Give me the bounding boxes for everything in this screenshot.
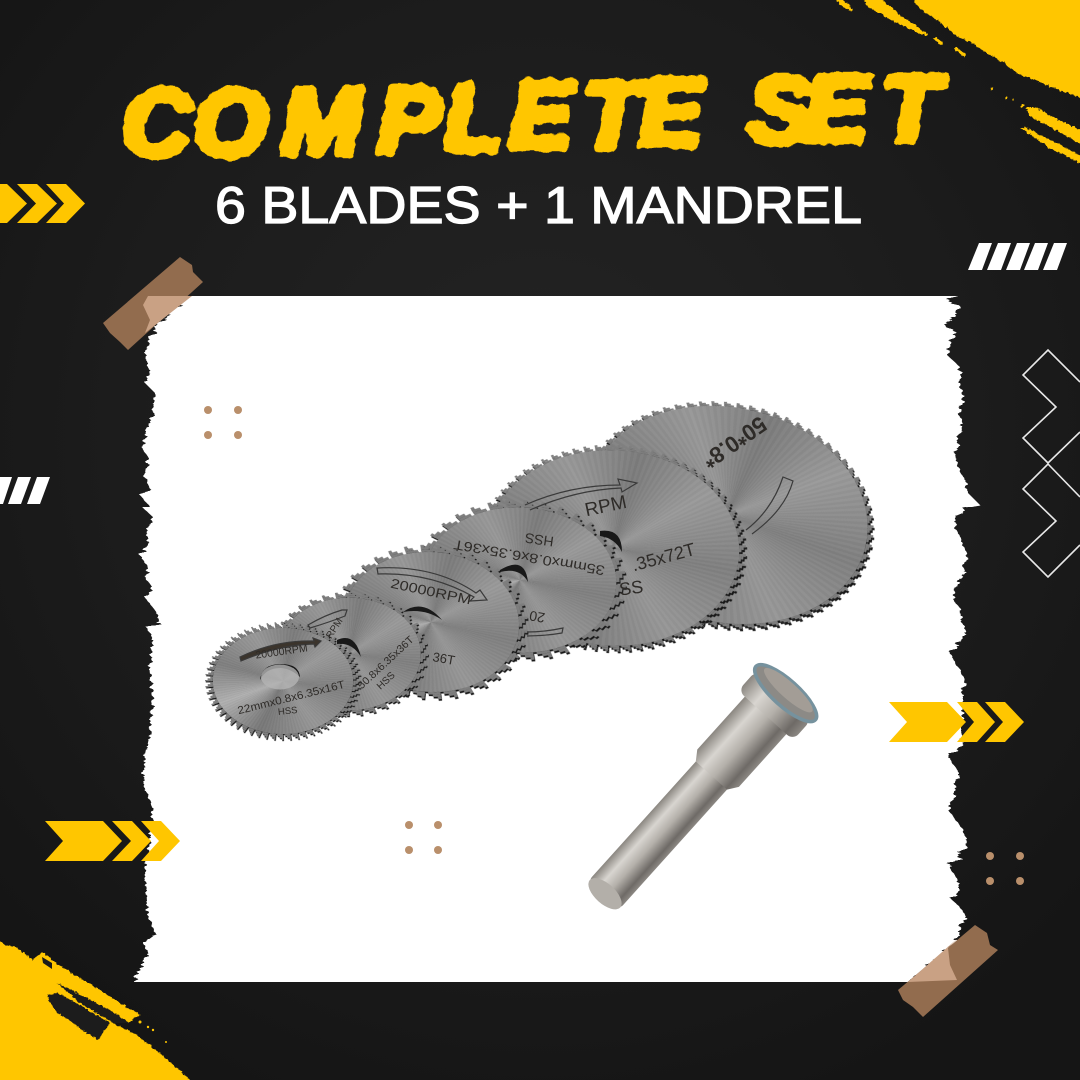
bottom-left yellow brush corner bbox=[0, 936, 197, 1080]
dots: upper-left of paper bbox=[204, 406, 242, 439]
blade text engravings bbox=[236, 411, 772, 718]
blade text engravings: HSS bbox=[277, 705, 298, 718]
blade text engravings: 20 bbox=[528, 608, 546, 626]
blade arrow engravings bbox=[240, 477, 793, 661]
white stripes: top-right bbox=[968, 243, 1067, 270]
mandrel thick section bbox=[691, 693, 790, 794]
blade 6: largest bbox=[599, 400, 875, 632]
white stripes: left bbox=[0, 477, 50, 504]
blade text engravings: .35x72T bbox=[629, 539, 697, 575]
blade text engravings: 20000RPM bbox=[255, 642, 308, 662]
tape: top-left bbox=[103, 257, 203, 350]
chevron arrows: right bbox=[889, 702, 1024, 742]
blade text engravings: SS bbox=[618, 576, 644, 600]
blade 3 bbox=[342, 544, 529, 702]
blade text engravings: 20000RPM bbox=[389, 576, 473, 607]
blade 1: smallest bbox=[205, 622, 362, 742]
zigzag outlines: right edge bbox=[1023, 350, 1080, 577]
mandrel screw head bbox=[759, 663, 817, 718]
blade text engravings: HSS bbox=[524, 530, 555, 550]
blade 4 bbox=[424, 500, 628, 662]
blade 5 bbox=[493, 444, 748, 654]
dots: lower-center of paper bbox=[405, 821, 442, 854]
chevron arrows: lower-left bbox=[45, 821, 180, 861]
mandrel bbox=[569, 657, 824, 928]
mandrel collar bbox=[738, 671, 811, 740]
blade text engravings: 36T bbox=[431, 649, 456, 668]
mandrel washer bbox=[747, 657, 824, 730]
top-right yellow brush corner bbox=[833, 0, 1080, 166]
blade 2 bbox=[280, 592, 429, 718]
blade hole openings bbox=[260, 531, 622, 690]
blade text engravings: RPM bbox=[324, 616, 345, 641]
mandrel shaft bbox=[587, 754, 734, 910]
blade text engravings: RPM bbox=[583, 492, 629, 521]
torn white paper panel bbox=[130, 286, 980, 990]
blade text engravings: 50*0.8* bbox=[698, 411, 772, 474]
tape: bottom-right bbox=[898, 925, 998, 1017]
blade text engravings: HSS bbox=[375, 670, 398, 692]
title: COMPLETE SET bbox=[122, 55, 947, 177]
mandrel tip bbox=[583, 873, 627, 915]
chevron arrows: top-left bbox=[0, 184, 85, 223]
blade text engravings: 50.8x6.35x36T bbox=[356, 633, 417, 692]
subtitle: 6 BLADES + 1 MANDREL bbox=[215, 177, 862, 235]
blade text engravings: 22mmx0.8x6.35x16T bbox=[236, 679, 346, 717]
blade text engravings: 35mmx0.8x6.35x36T bbox=[453, 537, 606, 578]
dots: right of paper bbox=[986, 852, 1024, 885]
